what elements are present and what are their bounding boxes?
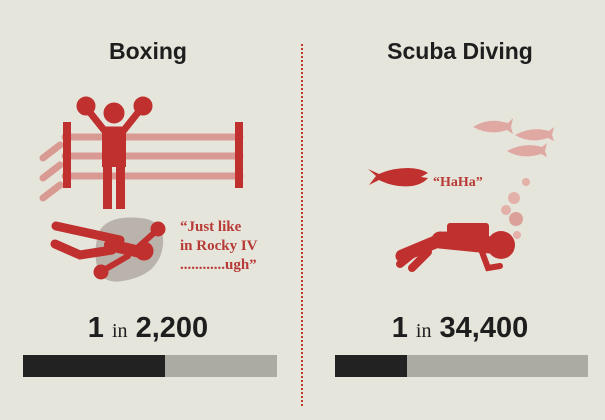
stat: scuba: 1 in 34,400 [392,312,528,344]
illustration: scuba [368,118,554,268]
bar: boxing [23,355,277,377]
quote: Rocky IV: “Just like [180,219,242,235]
quote: Rocky IV: in Rocky IV [180,238,258,254]
bubbles [501,178,530,239]
divider [301,44,303,406]
title: Boxing: Boxing [109,38,187,64]
quote: HaHa: “HaHa” [433,175,483,190]
red fish [368,168,428,186]
ring posts [63,122,71,188]
standing boxer [77,97,152,209]
bar: scuba [335,355,588,377]
diver [400,223,515,268]
fish school [473,118,554,157]
quote: Rocky IV: ............ugh” [180,257,257,273]
ring ropes [43,137,240,198]
stat: boxing: 1 in 2,200 [88,312,208,344]
knocked out boxer with shadow [95,218,163,282]
title: Scuba Diving: Scuba Diving [387,38,533,64]
